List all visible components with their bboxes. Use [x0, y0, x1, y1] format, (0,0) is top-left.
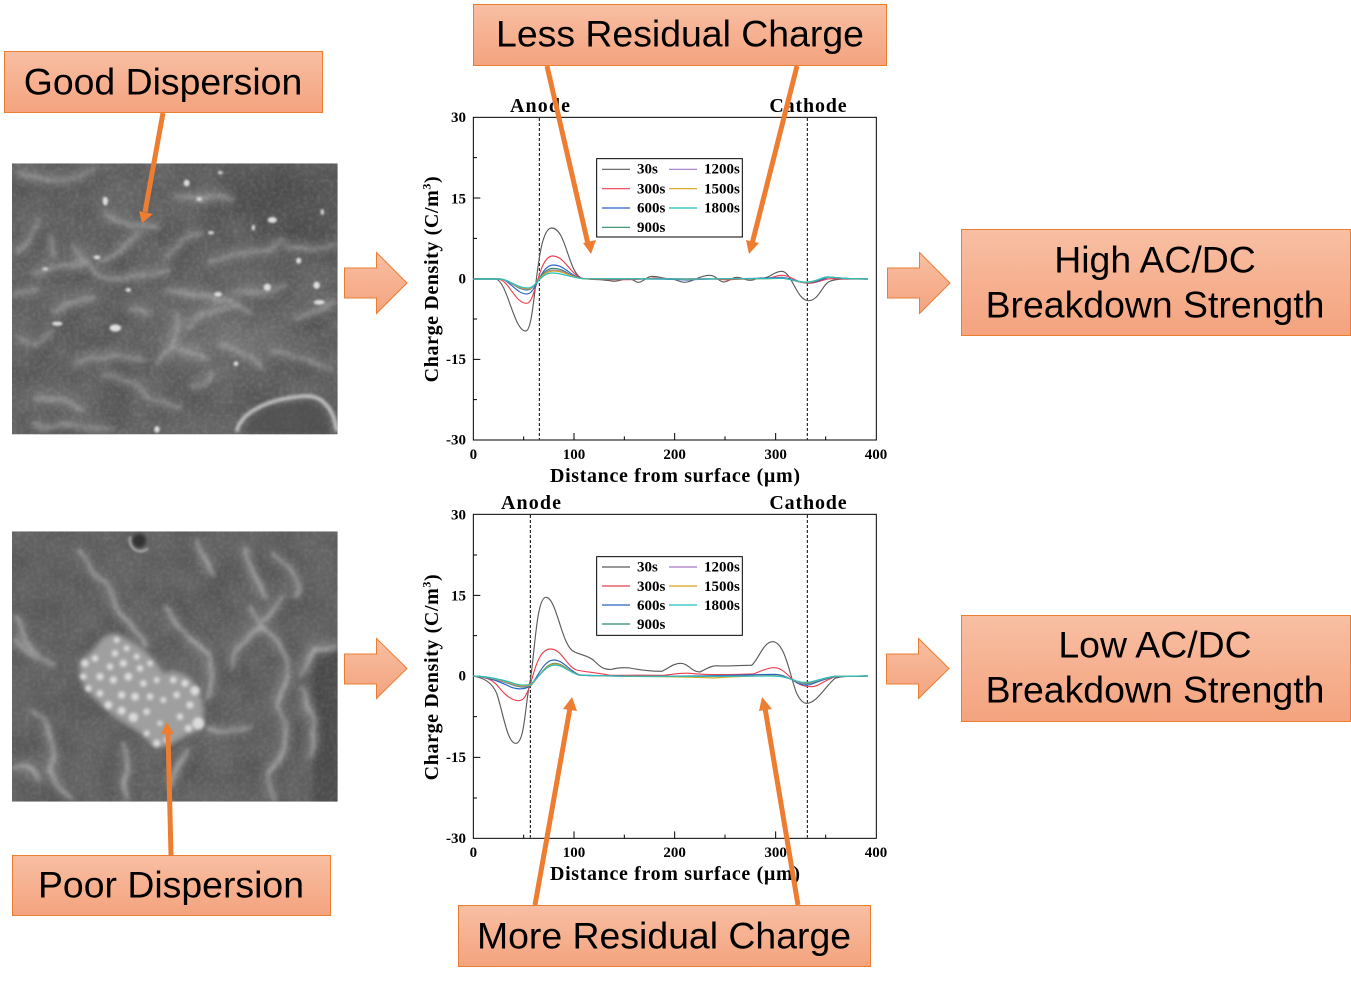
legend: 1200s: [704, 162, 740, 178]
y tick labels: [446, 110, 466, 449]
x tick labels: 100: [563, 845, 585, 861]
arrow: less residual charge left: [547, 66, 596, 254]
y tick labels: 30: [451, 110, 466, 126]
callout: high breakdown strength: High AC/DC: [1054, 238, 1256, 280]
arrow: image to chart, bottom: [344, 638, 407, 698]
legend: 1800s: [704, 201, 740, 217]
legend: 30s: [637, 162, 658, 178]
legend: [597, 159, 742, 237]
legend: [597, 557, 742, 635]
legend: 900s: [637, 220, 665, 236]
axis ticks: [473, 555, 826, 838]
cathode label: Cathode: [769, 95, 847, 117]
plot frame: [473, 117, 876, 440]
chart: poor dispersion space charge: [420, 492, 887, 885]
x tick labels: [470, 447, 887, 463]
x tick labels: 300: [764, 447, 787, 463]
anode label: Anode: [501, 492, 561, 514]
callout: poor dispersion: Poor Dispersion: [38, 864, 304, 906]
y tick labels: -15: [446, 750, 466, 766]
x tick labels: 0: [470, 447, 477, 463]
y tick labels: 0: [458, 669, 466, 685]
x tick labels: 300: [764, 845, 787, 861]
cathode label: Cathode: [769, 492, 847, 514]
callout: low breakdown strength: [962, 616, 1350, 722]
y tick labels: 15: [451, 589, 466, 605]
arrow: more residual charge left: [535, 697, 577, 905]
x tick labels: 400: [865, 845, 887, 861]
arrow: chart to result, bottom: [886, 638, 949, 698]
arrow: less residual charge right: [746, 66, 797, 254]
y axis title: Charge Density (C/m: [421, 588, 443, 780]
y axis title: 3: [420, 582, 434, 588]
x tick labels: 200: [663, 447, 686, 463]
anode label: Anode: [510, 95, 570, 117]
callout: high breakdown strength: [962, 230, 1350, 336]
callout: less residual charge: Less Residual Charge: [496, 12, 864, 54]
callout: more residual charge: [458, 906, 870, 966]
legend: 600s: [637, 598, 665, 614]
callout: low breakdown strength: Low AC/DC: [1058, 624, 1252, 666]
y axis title: Charge Density (C/m: [421, 190, 443, 382]
legend: 1800s: [704, 598, 740, 614]
legend: 1500s: [704, 579, 740, 595]
y tick labels: 30: [451, 507, 466, 523]
y tick labels: [446, 507, 466, 847]
SEM image: good dispersion: [12, 163, 339, 438]
callout: poor dispersion: [12, 856, 330, 916]
callout: more residual charge: More Residual Charge: [477, 914, 851, 956]
x tick labels: 200: [663, 845, 686, 861]
legend: 900s: [637, 617, 665, 633]
SEM image: poor dispersion: [12, 531, 344, 806]
callout: low breakdown strength: Breakdown Strength: [986, 668, 1324, 710]
axis ticks: [473, 158, 826, 440]
y tick labels: 15: [451, 191, 466, 207]
y axis title: 3: [420, 184, 434, 190]
callout: good dispersion: Good Dispersion: [24, 60, 302, 102]
legend: 1200s: [704, 560, 740, 576]
x tick labels: 100: [563, 447, 585, 463]
y tick labels: -15: [446, 352, 466, 368]
callout: high breakdown strength: Breakdown Strength: [986, 284, 1324, 326]
chart: good dispersion space charge: [420, 95, 887, 487]
curves: [473, 228, 868, 331]
y tick labels: 0: [458, 271, 466, 287]
arrow: image to chart, top: [344, 252, 407, 314]
x axis title: Distance from surface (µm): [550, 863, 800, 885]
x tick labels: [470, 845, 887, 861]
legend: 300s: [637, 579, 665, 595]
x tick labels: 0: [470, 845, 477, 861]
y axis title: ): [421, 176, 443, 183]
y tick labels: -30: [446, 831, 466, 847]
arrow: more residual charge right: [759, 697, 798, 905]
legend: 600s: [637, 201, 665, 217]
callout: good dispersion: [4, 52, 322, 112]
arrow: poor dispersion pointer: [161, 722, 174, 855]
legend: 1500s: [704, 182, 740, 198]
curves: [473, 597, 868, 743]
electrode dashed lines: [530, 515, 807, 838]
arrow: good dispersion pointer: [139, 113, 163, 223]
electrode dashed lines: [539, 118, 807, 439]
y axis title: ): [421, 574, 443, 581]
plot frame: [473, 514, 876, 838]
legend: 300s: [637, 182, 665, 198]
y tick labels: -30: [446, 433, 466, 449]
arrow: chart to result, top: [888, 252, 950, 314]
legend: 30s: [637, 560, 658, 576]
x tick labels: 400: [865, 447, 887, 463]
x axis title: Distance from surface (µm): [550, 465, 800, 487]
callout: less residual charge: [474, 4, 886, 66]
